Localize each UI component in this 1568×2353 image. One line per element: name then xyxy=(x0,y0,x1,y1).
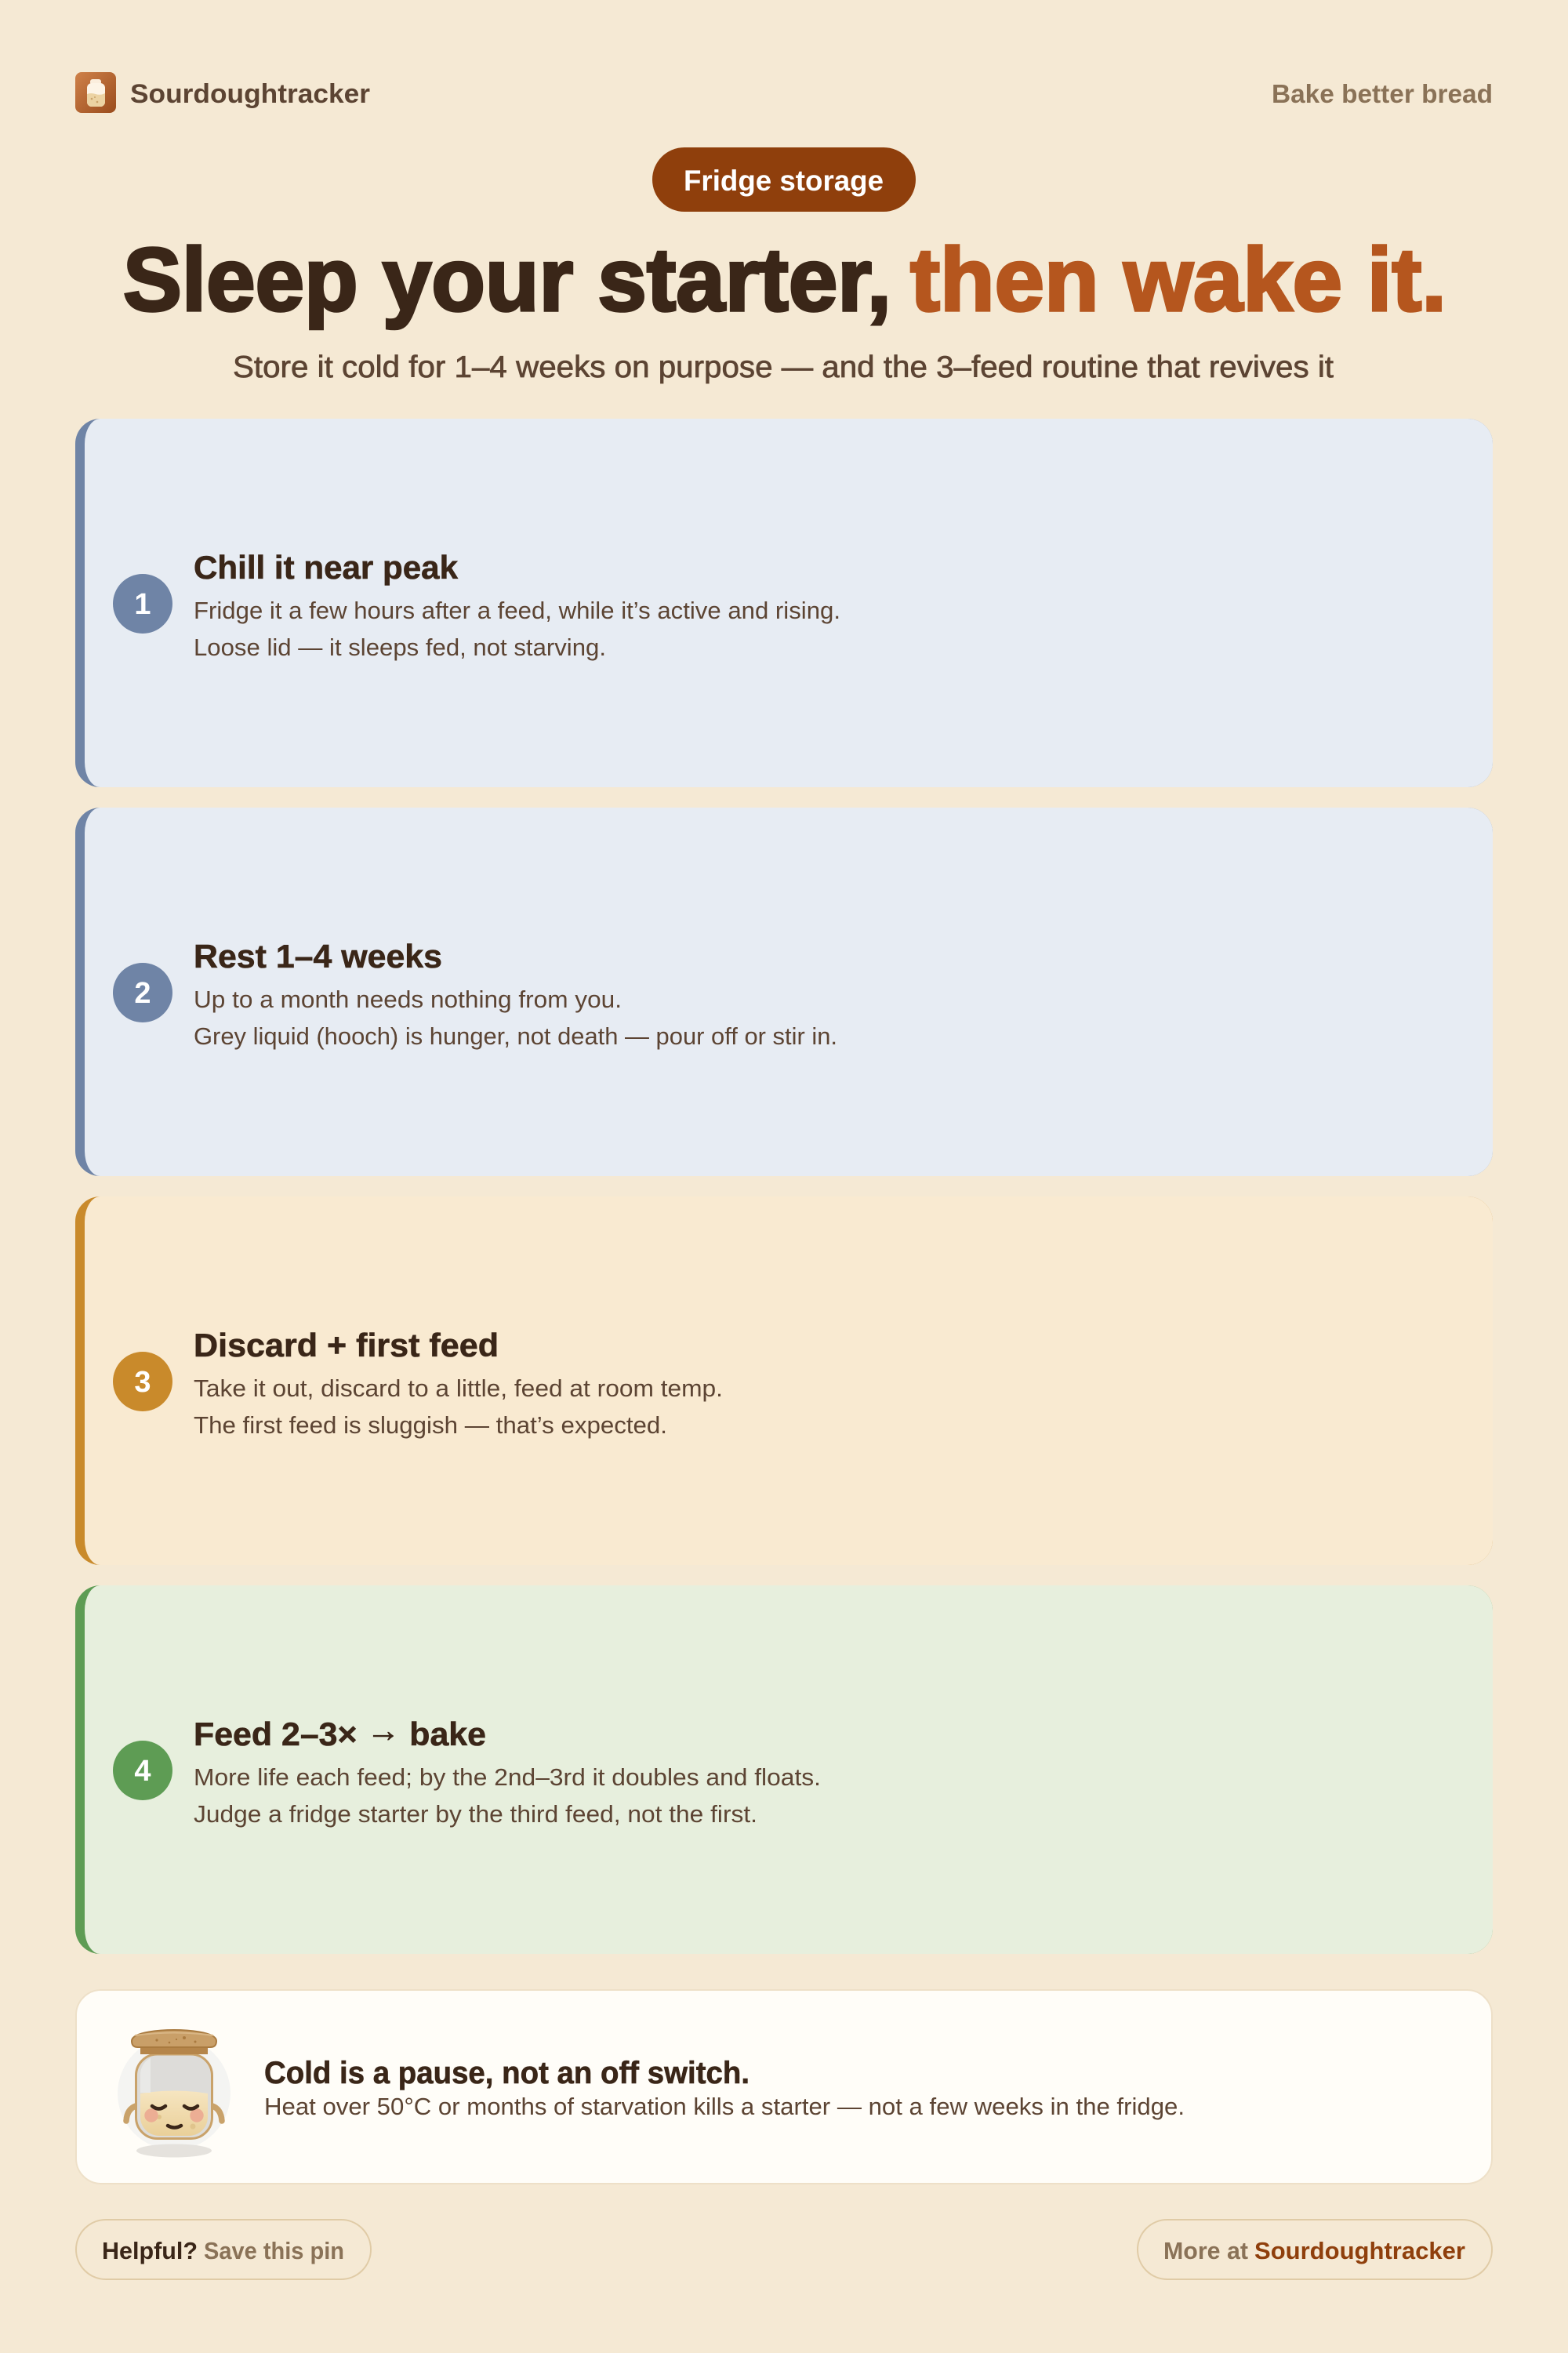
badge: fridge storage xyxy=(652,147,916,212)
step 2 text xyxy=(194,938,837,1050)
step 2 text: Rest 1–4 weeks xyxy=(194,938,442,975)
callout text xyxy=(264,2056,1185,2120)
step number 2: 2 xyxy=(134,977,151,1010)
step number 4 xyxy=(113,1741,172,1800)
step number 1: 1 xyxy=(134,588,151,621)
step number 3 xyxy=(113,1352,172,1411)
step 3 text xyxy=(194,1327,723,1439)
callout text: Cold is a pause, not an off switch. xyxy=(264,2056,750,2090)
step 4 text: → xyxy=(366,1712,400,1748)
step 4 text xyxy=(194,1712,821,1828)
subtitle: Store it cold for 1–4 weeks on purpose — and the 3–feed routine that revives it xyxy=(233,350,1334,384)
step number 4: 4 xyxy=(134,1755,151,1788)
header: logo and brand xyxy=(75,72,370,113)
badge: fridge storage: Fridge storage xyxy=(684,165,884,197)
icon: sleeping jar mascot xyxy=(118,2030,230,2158)
footer pill: save xyxy=(76,2220,371,2279)
step number 1 xyxy=(113,574,172,634)
step 3 text: The first feed is sluggish — that’s expected. xyxy=(194,1411,667,1439)
panel: step 4 feed xyxy=(75,1585,1493,1954)
step 1 text: Loose lid — it sleeps fed, not starving. xyxy=(194,634,606,661)
step 3 text: Take it out, discard to a little, feed at room temp. xyxy=(194,1374,723,1402)
callout text: Heat over 50°C or months of starvation kills a starter — not a few weeks in the fridge. xyxy=(264,2093,1185,2120)
footer pill: save: Save this pin xyxy=(204,2237,344,2264)
title: Sleep your starter, xyxy=(123,231,891,330)
title: then wake it. xyxy=(910,231,1446,330)
step 2 text: Up to a month needs nothing from you. xyxy=(194,986,622,1013)
step 4 text: More life each feed; by the 2nd–3rd it doubles and floats. xyxy=(194,1763,821,1791)
brand name: Sourdoughtracker xyxy=(130,79,370,109)
step 1 text xyxy=(194,549,840,661)
step 4 text: Judge a fridge starter by the third feed, not the first. xyxy=(194,1800,757,1828)
panel: callout xyxy=(76,1990,1492,2184)
tagline: Bake better bread xyxy=(1272,79,1493,108)
icon: jar logo xyxy=(75,72,116,113)
footer pill: more: Sourdoughtracker xyxy=(1254,2237,1465,2264)
footer pill: save: Helpful? xyxy=(102,2237,198,2264)
step 4 text: Feed 2–3× xyxy=(194,1716,354,1752)
step 4 text: bake xyxy=(409,1716,486,1752)
footer pill: more xyxy=(1138,2220,1492,2279)
panel: step 3 discard xyxy=(75,1196,1493,1565)
footer pill: more: More at xyxy=(1163,2237,1248,2264)
panel: step 2 rest xyxy=(75,808,1493,1176)
panel: step 1 chill xyxy=(75,419,1493,787)
step 3 text: Discard + first feed xyxy=(194,1327,499,1364)
step 2 text: Grey liquid (hooch) is hunger, not death — pour off or stir in. xyxy=(194,1022,837,1050)
step number 2 xyxy=(113,963,172,1022)
title xyxy=(123,231,1446,330)
step 1 text: Chill it near peak xyxy=(194,549,459,586)
step number 3: 3 xyxy=(134,1366,151,1399)
step 1 text: Fridge it a few hours after a feed, while it’s active and rising. xyxy=(194,597,840,624)
